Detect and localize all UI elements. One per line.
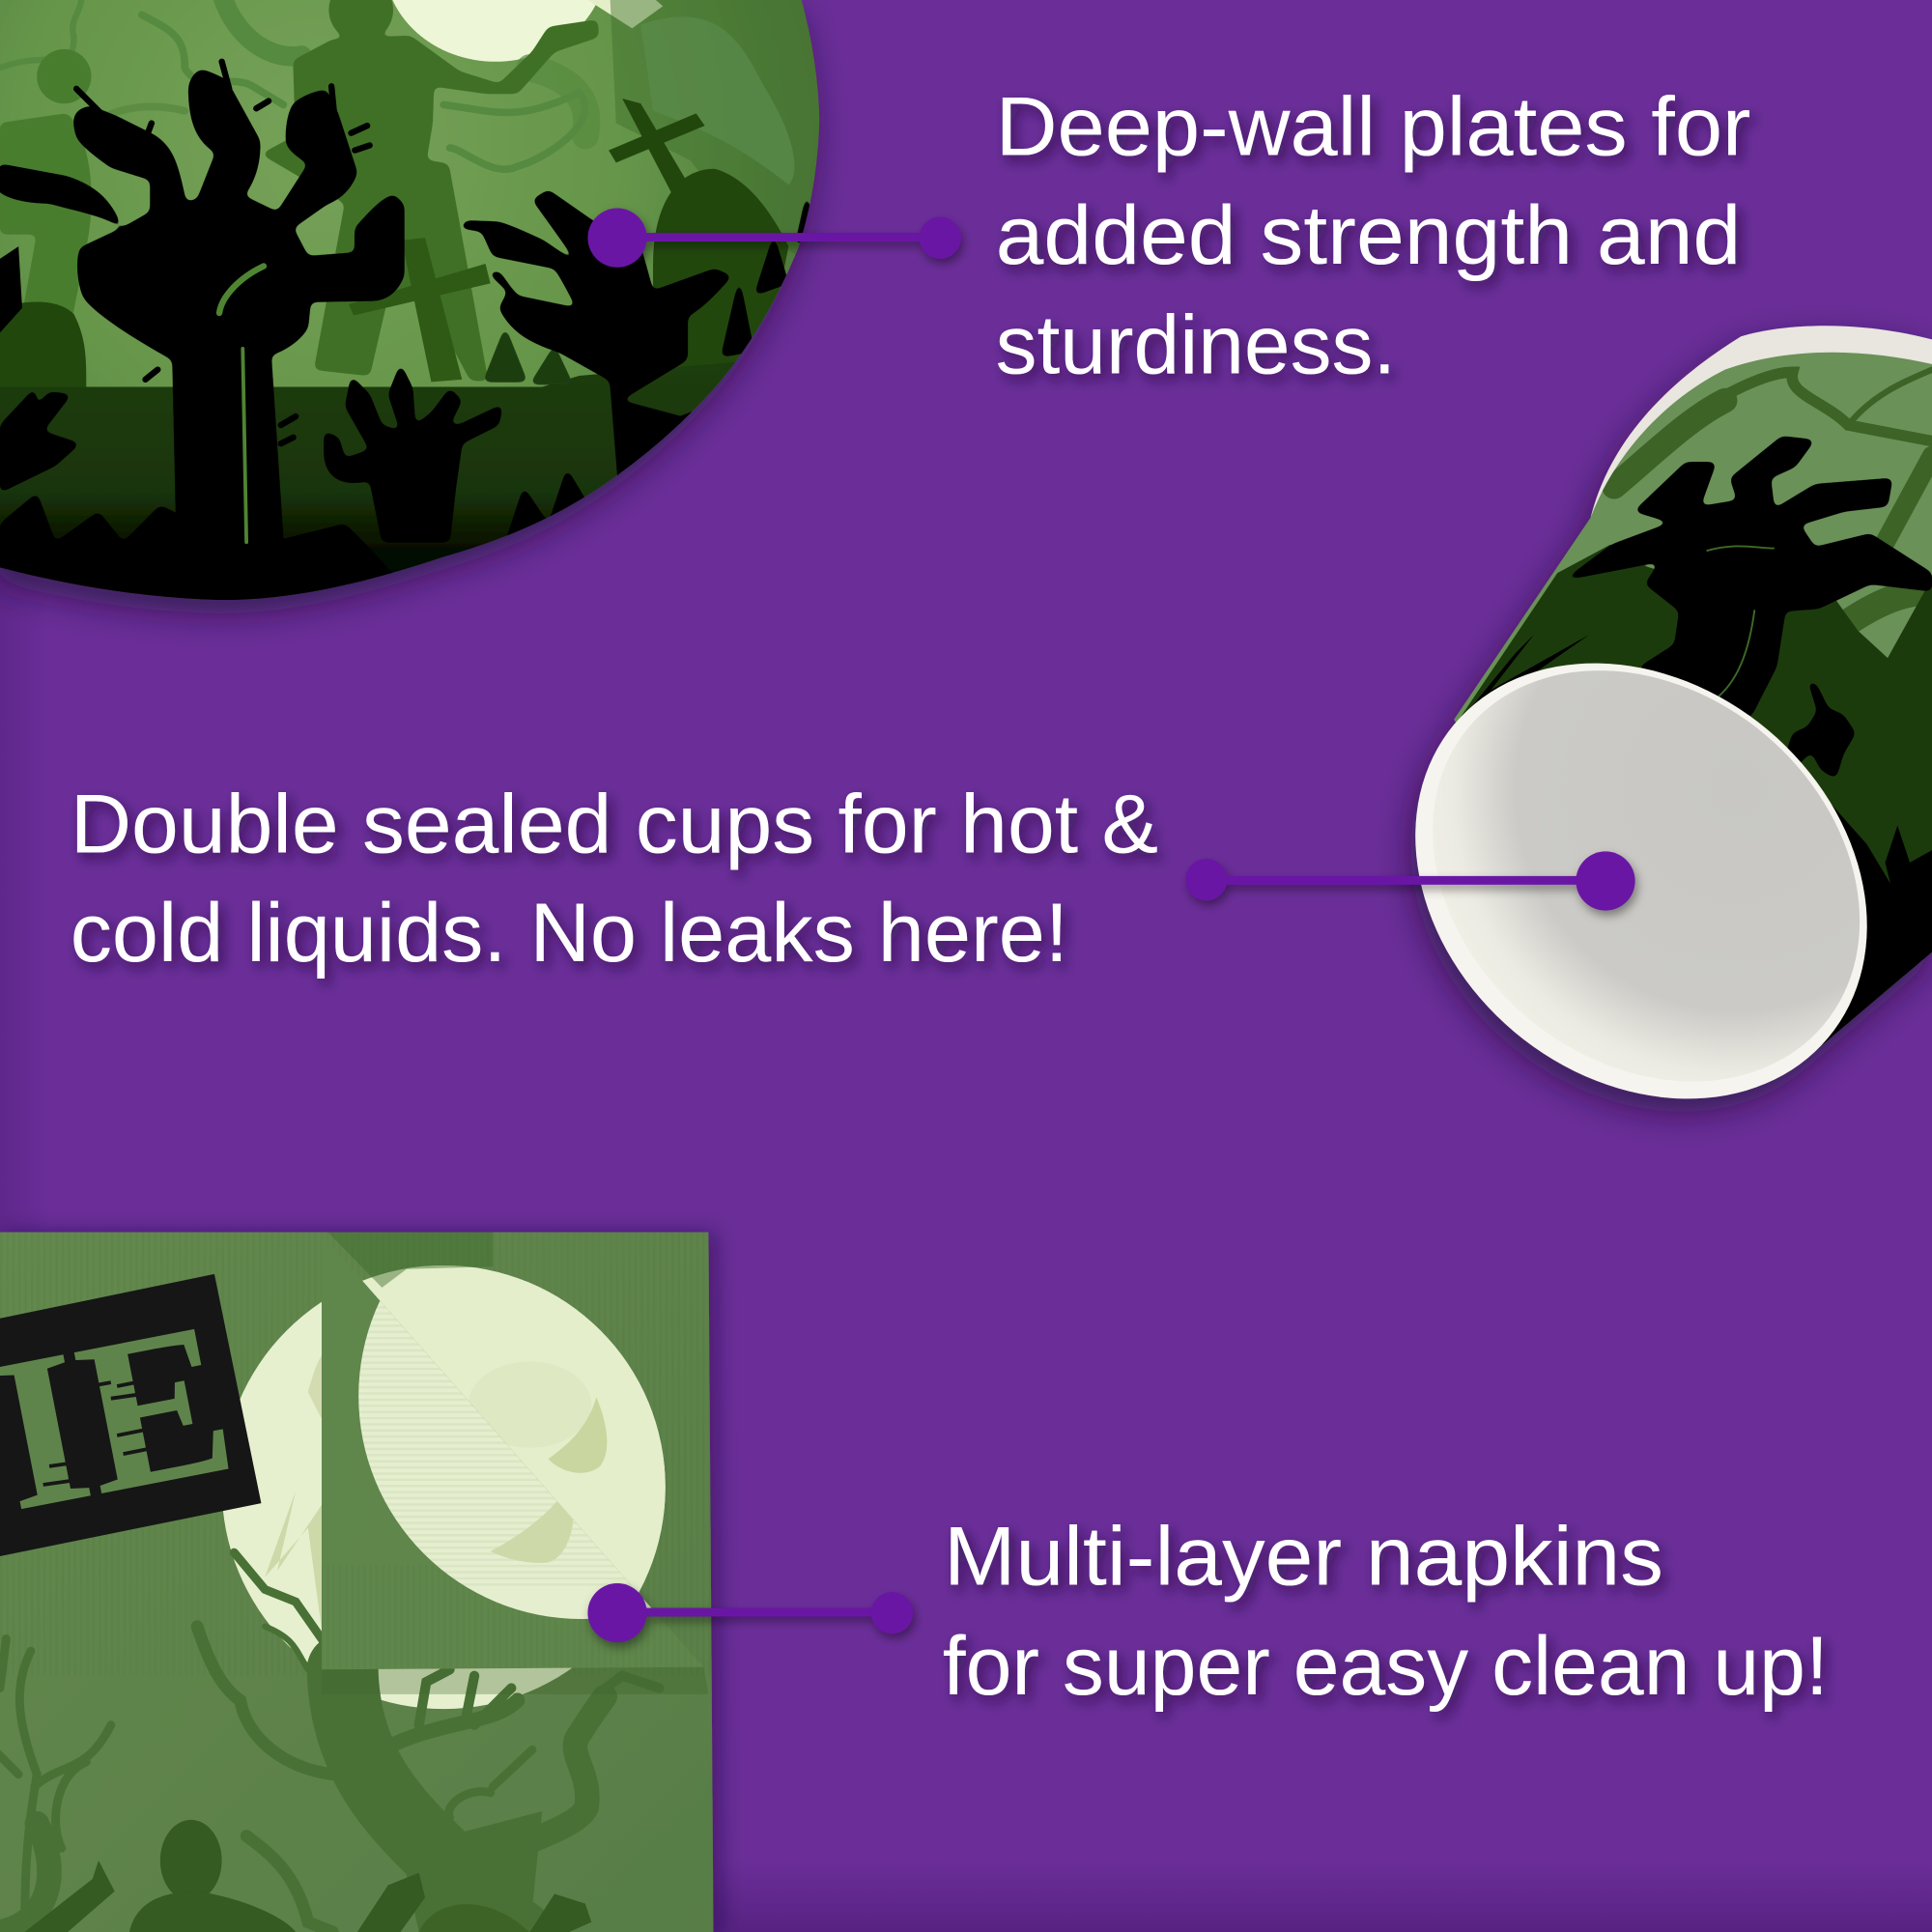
background branches xyxy=(0,0,586,173)
napkin tree silhouettes xyxy=(0,1552,659,1932)
cup lower black band xyxy=(1812,805,1932,1064)
hand stitches xyxy=(76,62,370,443)
main zombie hand xyxy=(0,70,404,579)
text: deep-wall plates: sturdiness. xyxy=(996,298,1396,391)
text: multi-layer napkins: for super easy clean up! xyxy=(943,1619,1829,1713)
cup dark ground xyxy=(1454,545,1932,985)
text: deep-wall plates: Deep-wall plates for xyxy=(996,80,1750,174)
napkin black label xyxy=(0,1274,261,1588)
plate illustration xyxy=(0,0,826,604)
hand highlights xyxy=(219,267,264,542)
text: deep-wall plates: added strength and xyxy=(996,188,1741,282)
moon portion right of fold xyxy=(222,1265,666,1709)
text: multi-layer napkins: Multi-layer napkins xyxy=(944,1509,1663,1603)
callout: cups connector xyxy=(1185,851,1635,911)
grass blades xyxy=(0,191,815,604)
text: double sealed cups xyxy=(71,778,1158,980)
right tree and cross xyxy=(0,0,826,388)
text: deep-wall plates xyxy=(996,80,1750,391)
background zombie figures xyxy=(0,0,599,381)
cup grass xyxy=(1459,635,1589,727)
ground xyxy=(0,357,788,604)
folded flap xyxy=(314,1173,805,1676)
napkin moon xyxy=(222,1265,666,1709)
callout: napkins connector xyxy=(587,1583,913,1642)
fold shadow xyxy=(327,1233,493,1288)
small cup silhouettes xyxy=(1786,680,1856,779)
cup illustration xyxy=(1389,317,1932,1134)
cup zombie hand xyxy=(1564,437,1932,717)
moon xyxy=(384,0,663,62)
napkin illustration xyxy=(0,1173,805,1932)
small zombie hand xyxy=(324,363,502,542)
cup base xyxy=(1327,573,1932,1189)
callout: plates connector xyxy=(587,209,961,268)
left edge zombie hand xyxy=(0,392,76,491)
text: double sealed cups: Double sealed cups for hot & xyxy=(71,778,1158,871)
napkin zombies xyxy=(25,1820,591,1932)
graveyard crosses and tombstones xyxy=(349,238,491,382)
right zombie hand xyxy=(460,189,732,518)
text: multi-layer napkins xyxy=(943,1509,1829,1713)
cup wall xyxy=(1441,332,1932,1072)
cup rim xyxy=(1591,326,1932,529)
text: double sealed cups: cold liquids. No leaks here! xyxy=(71,886,1068,980)
cup background zombie and trees xyxy=(1614,370,1932,622)
hand highlight xyxy=(1707,546,1775,696)
